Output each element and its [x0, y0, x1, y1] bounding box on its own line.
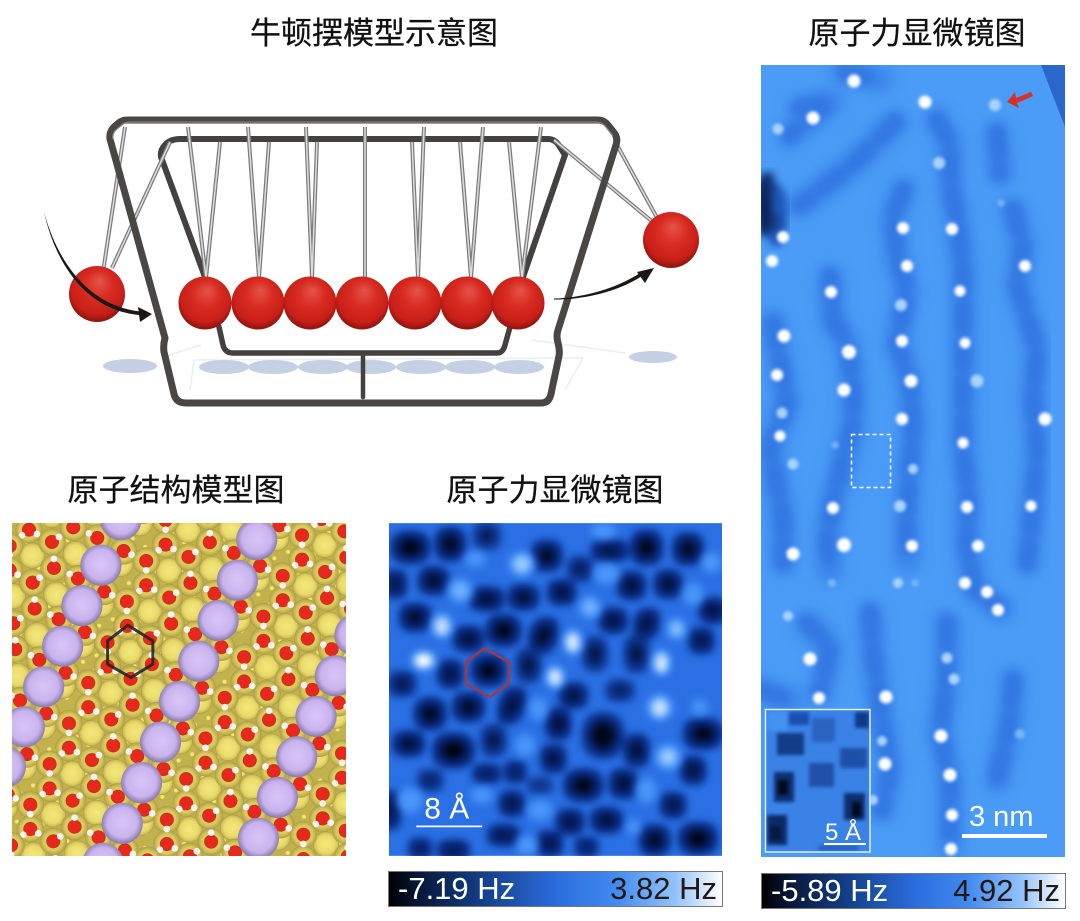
- water molecules: [0, 401, 443, 921]
- inset scale label: 5 Å: [825, 818, 861, 846]
- arrow: incoming swing: [44, 212, 152, 322]
- outer frame: [110, 120, 617, 403]
- purple cations: [0, 499, 376, 884]
- bright spots: [398, 523, 721, 855]
- title: atomic structure: 原子结构模型图: [68, 473, 284, 508]
- panel: AFM image centre: [389, 523, 722, 856]
- large yellow atoms: [0, 490, 466, 891]
- dark stripes: [761, 72, 1037, 847]
- panel: Newton's cradle illustration: [44, 116, 699, 406]
- inset image: [766, 710, 870, 852]
- ground shadows: [103, 340, 677, 390]
- max label: 3.82 Hz: [610, 871, 717, 906]
- min label: -7.19 Hz: [398, 871, 515, 906]
- arrow: outgoing swing: [554, 268, 654, 300]
- dark corner wedge: [1041, 65, 1065, 127]
- hexagon marker: [466, 648, 509, 697]
- inner frame: [161, 139, 565, 397]
- panel: AFM large image right: [761, 65, 1065, 857]
- inset scale bar: [824, 843, 866, 845]
- balls: [69, 212, 699, 330]
- scale bar: [962, 834, 1047, 838]
- min label: -5.89 Hz: [771, 873, 888, 908]
- max label: 4.92 Hz: [953, 873, 1060, 908]
- dashed selection box: [852, 434, 890, 488]
- red arrow marker: [1007, 92, 1033, 108]
- colour bar centre: [388, 871, 723, 907]
- scale bar: [416, 826, 482, 827]
- title: AFM centre: 原子力显微镜图: [446, 473, 664, 508]
- darker blotch left edge: [756, 171, 788, 247]
- title: AFM right: 原子力显微镜图: [808, 16, 1026, 51]
- rods: [103, 127, 661, 278]
- title: Newton's cradle: 牛顿摆模型示意图: [250, 16, 498, 51]
- colour bar right: [761, 873, 1066, 909]
- panel: atomic structure model: [12, 523, 346, 856]
- hexagon marker: [108, 625, 153, 678]
- scale label 3 nm: 3 nm: [969, 801, 1033, 833]
- scale label 8 Å: 8 Å: [424, 793, 469, 826]
- bright adsorbates: [766, 74, 1052, 855]
- dark pores: [384, 526, 723, 856]
